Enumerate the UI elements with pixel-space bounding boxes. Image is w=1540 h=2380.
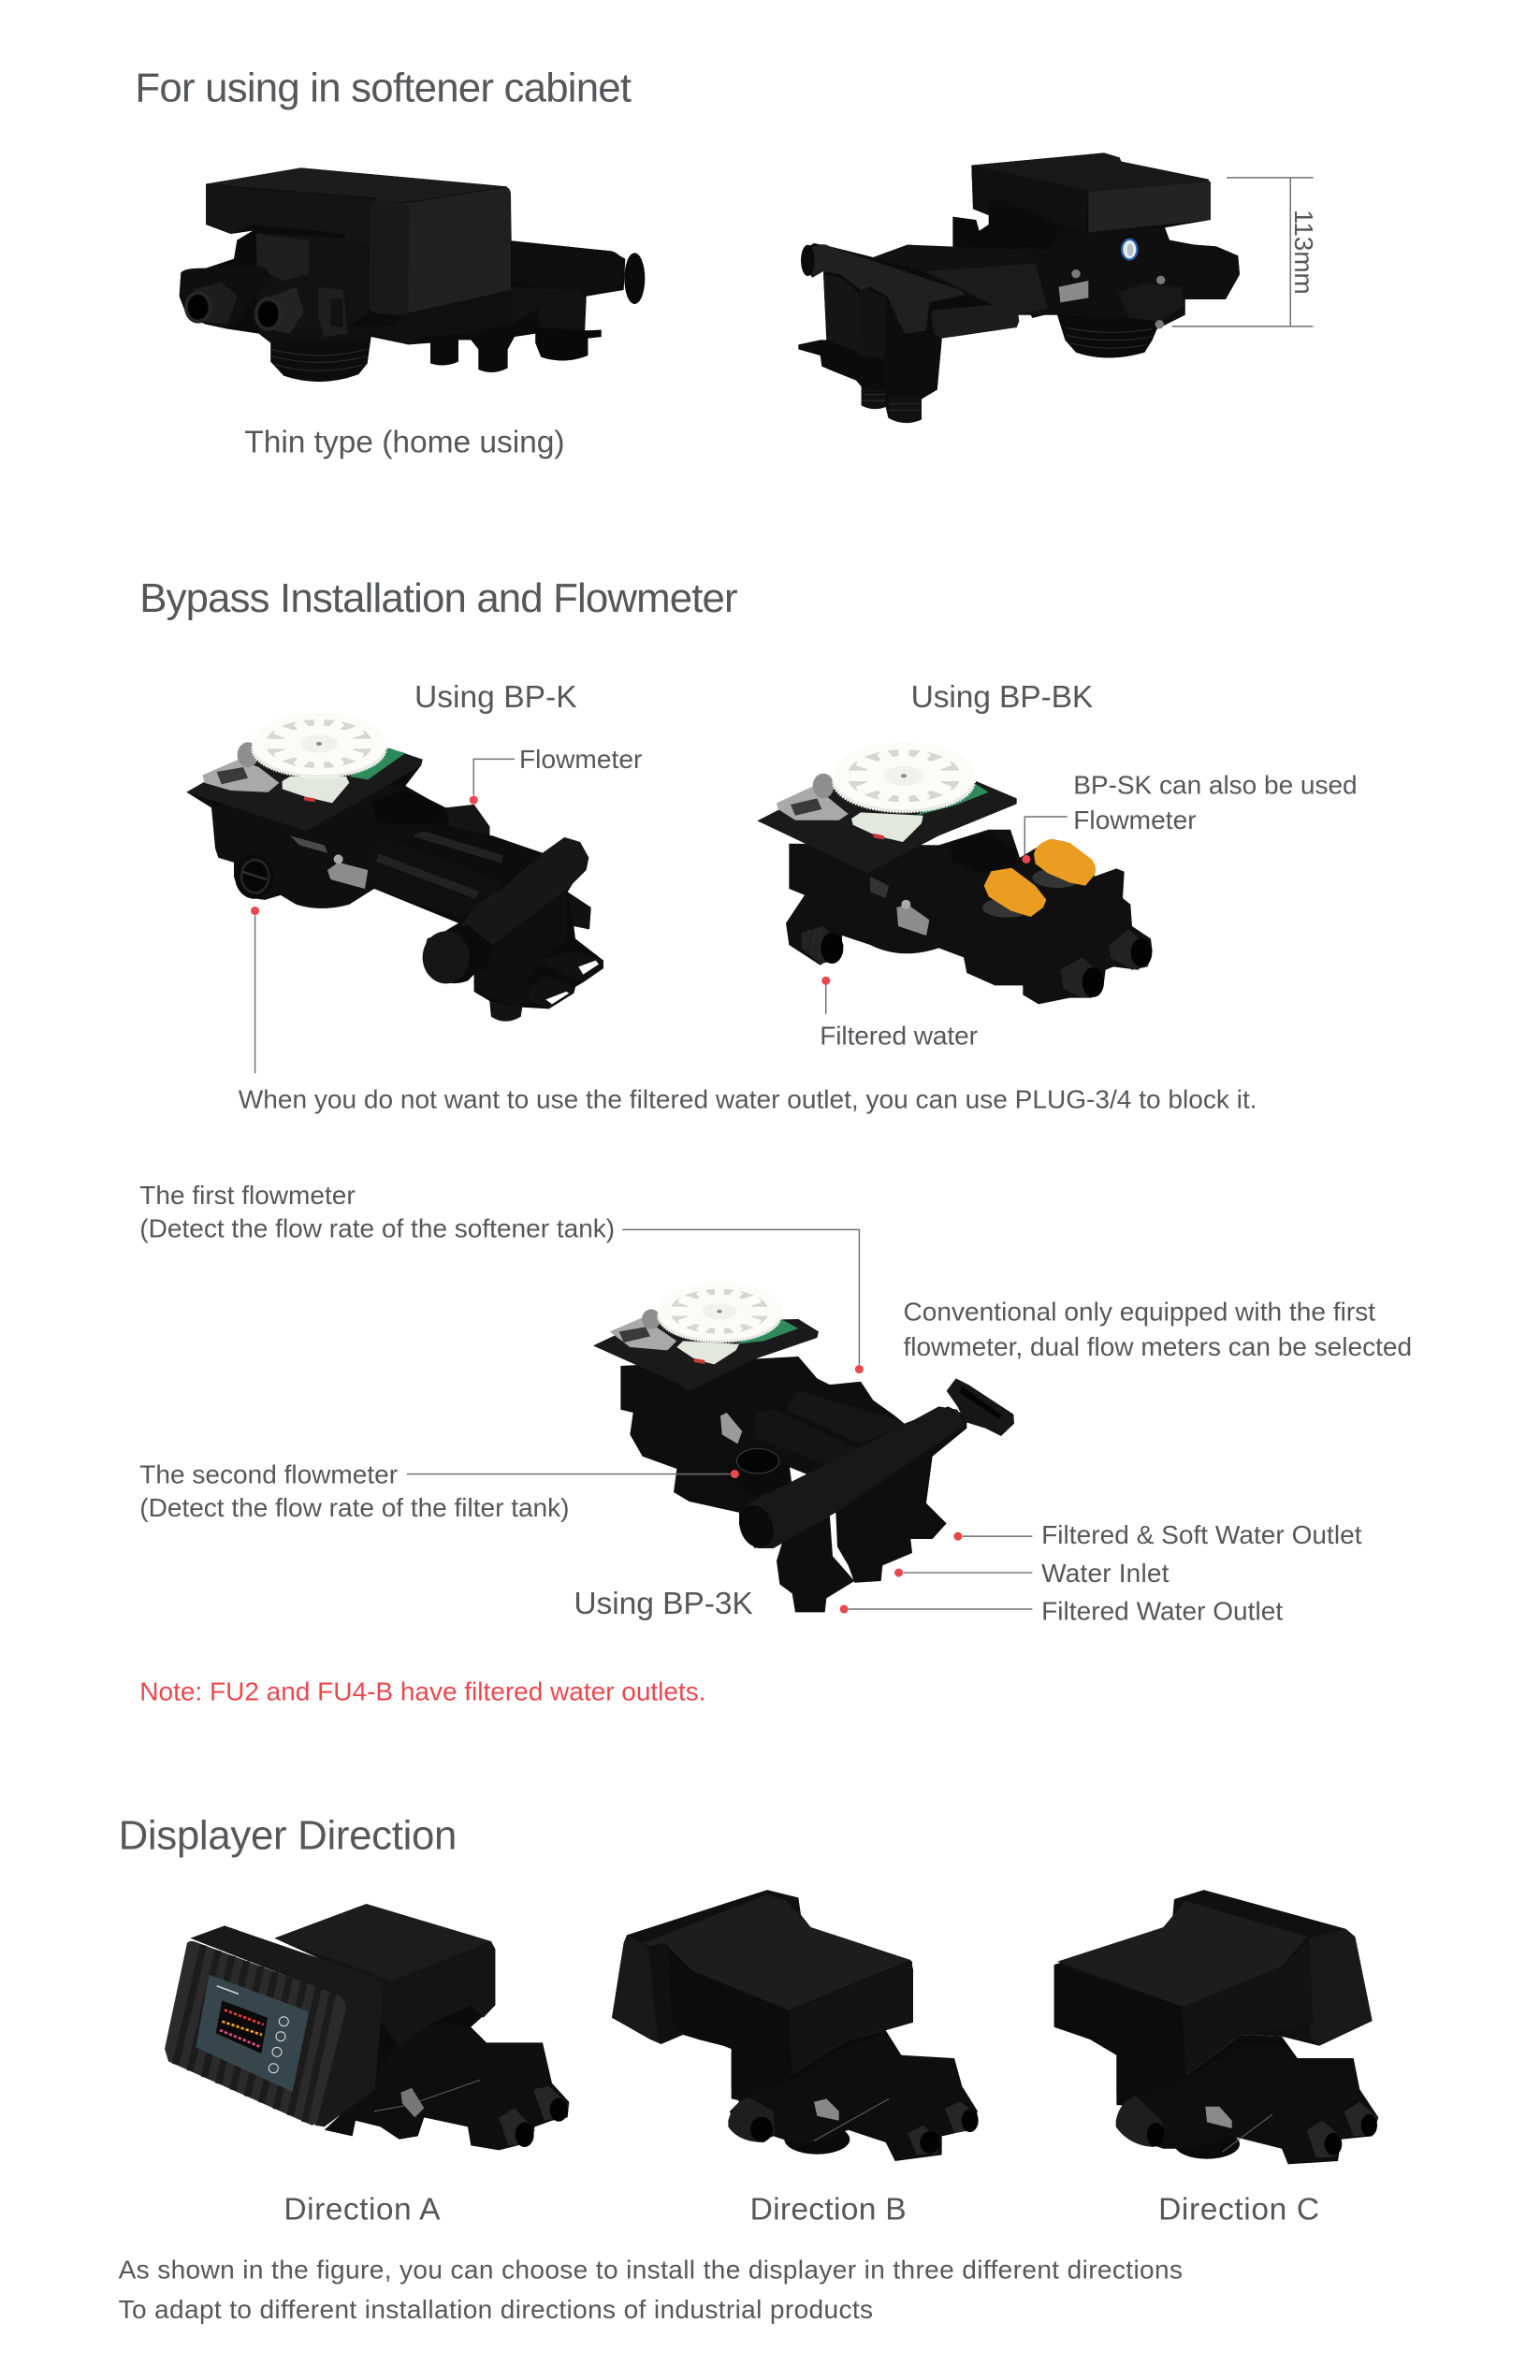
callout: second flowmeter: The second flowmeter xyxy=(139,1459,398,1488)
underlay xyxy=(732,2030,901,2112)
connector xyxy=(676,1341,739,1364)
callout: filtered water: Filtered water xyxy=(820,1021,978,1050)
manifold lower xyxy=(487,889,568,989)
gloss highlight xyxy=(290,835,327,853)
label: thin type: Thin type (home using) xyxy=(244,426,565,460)
silhouette xyxy=(186,742,603,1022)
product: thin type valve, rear xyxy=(798,152,1240,423)
T handle xyxy=(947,1378,1014,1436)
label: direction B: Direction B xyxy=(750,2192,907,2227)
threaded base xyxy=(1065,318,1154,358)
callout: second flowmeter: (Detect the flow rate of the filter tank) xyxy=(139,1493,569,1522)
silver bracket xyxy=(777,774,849,820)
callout: water inlet: Water Inlet xyxy=(1041,1559,1170,1588)
rear cover xyxy=(274,1904,495,2046)
dimension: 113mm: 113mm xyxy=(1289,210,1318,295)
top plate xyxy=(186,742,423,831)
product: direction C xyxy=(1054,1890,1378,2164)
callout: BP-BK flowmeter: BP-SK can also be used xyxy=(1073,771,1358,800)
silver bracket xyxy=(610,1309,676,1350)
PCB xyxy=(349,747,405,779)
port xyxy=(235,854,273,899)
end cap xyxy=(624,253,645,304)
top surface xyxy=(1057,1901,1307,2007)
silver bracket xyxy=(203,742,279,792)
title: For using in softener cabinet: For using in softener cabinet xyxy=(135,65,632,111)
rear pipe xyxy=(396,823,543,881)
threaded base xyxy=(270,341,368,382)
panel shell xyxy=(190,1925,384,2126)
text: displayer explanation xyxy=(119,2256,1183,2324)
product: valve with BP-3K bypass xyxy=(593,1283,1014,1612)
callout: filtered water outlet xyxy=(840,1596,1283,1625)
left wing xyxy=(612,1935,658,2042)
note: FU2 and FU4-B: Note: FU2 and FU4-B have filtered water outlets. xyxy=(139,1676,706,1705)
front face xyxy=(667,1946,792,2074)
left port xyxy=(180,265,274,329)
label: direction A: Direction A xyxy=(283,2192,441,2227)
product: direction A xyxy=(165,1904,569,2150)
bottom thread xyxy=(489,1001,522,1022)
pipes xyxy=(755,1391,908,1466)
handle discs xyxy=(982,868,1082,918)
valve fittings xyxy=(325,2024,569,2150)
hose fitting xyxy=(952,833,1017,873)
gear xyxy=(658,1283,781,1342)
foot xyxy=(535,327,602,360)
silhouette xyxy=(786,830,1153,1004)
body xyxy=(259,287,512,344)
side bracket xyxy=(568,892,591,929)
label: using BP-3K: Using BP-3K xyxy=(574,1587,753,1621)
PCB xyxy=(736,1319,798,1344)
callout: filtered water outlet: Filtered Water Outlet xyxy=(1041,1596,1283,1625)
text: displayer explanation: As shown in the figure, you can choose to install the displayer in three different directions xyxy=(119,2256,1183,2285)
front face xyxy=(1054,1965,1185,2074)
underlay xyxy=(1116,2035,1298,2112)
housing base xyxy=(612,1890,913,2074)
gear xyxy=(833,742,975,812)
callout: filtered water xyxy=(820,977,978,1050)
manifold xyxy=(801,244,966,334)
plug xyxy=(423,924,493,983)
valve body xyxy=(1017,227,1240,329)
connector xyxy=(283,776,349,803)
text: displayer explanation: To adapt to different installation directions of industrial products xyxy=(119,2295,873,2324)
callout: BP-BK flowmeter xyxy=(1022,771,1358,863)
callout: first flowmeter: (Detect the flow rate of the softener tank) xyxy=(139,1213,615,1242)
underlay xyxy=(337,1949,495,2130)
bracket loop xyxy=(318,287,348,337)
blue port xyxy=(1121,239,1139,261)
right face xyxy=(1184,1939,1313,2074)
silver clip xyxy=(327,863,368,889)
dimension: 113mm xyxy=(1172,178,1318,327)
callout: filtered and soft water outlet: Filtered & Soft Water Outlet xyxy=(1041,1520,1362,1549)
silhouette xyxy=(620,1357,966,1612)
elbow xyxy=(512,287,587,334)
buttons xyxy=(269,2017,288,2073)
controller box xyxy=(206,167,511,315)
rear flowmeter xyxy=(446,805,489,835)
screws xyxy=(1071,269,1165,328)
PCB xyxy=(917,784,989,816)
callout: flowmeter BP-K: Flowmeter xyxy=(519,745,642,774)
stem xyxy=(732,2052,792,2102)
silver clip xyxy=(896,905,929,936)
gap between pipes xyxy=(790,1467,821,1486)
panel face xyxy=(165,1941,346,2126)
stems xyxy=(823,274,942,393)
foot loops xyxy=(474,951,603,1009)
threads xyxy=(862,386,922,423)
valve fittings xyxy=(1116,2046,1378,2164)
stem xyxy=(1116,2055,1185,2102)
second flowmeter xyxy=(727,1448,789,1497)
callout: BP-BK flowmeter: Flowmeter xyxy=(1073,805,1197,834)
gloss highlight xyxy=(870,877,889,898)
silver clip xyxy=(1059,281,1088,302)
side clip xyxy=(1118,283,1184,321)
silhouette xyxy=(180,167,625,382)
front port xyxy=(1060,957,1104,998)
screen xyxy=(196,1975,309,2092)
right face xyxy=(789,1961,913,2074)
text: conventional flowmeter: Conventional only equipped with the first xyxy=(903,1298,1375,1327)
right pipe xyxy=(512,240,624,297)
valve fittings xyxy=(728,2033,979,2161)
callout: first flowmeter xyxy=(139,1181,864,1373)
pipe highlights xyxy=(377,833,502,895)
housing base xyxy=(1054,1890,1373,2074)
product: direction B xyxy=(612,1890,979,2161)
main body xyxy=(211,786,446,908)
heading: displayer direction: Displayer Direction xyxy=(119,1812,457,1858)
rear pipes xyxy=(873,245,1048,315)
top plate xyxy=(593,1319,819,1391)
callout: second flowmeter xyxy=(139,1459,739,1522)
bypass lever xyxy=(931,302,1019,339)
label: using BP-BK: Using BP-BK xyxy=(911,680,1094,715)
end cap xyxy=(734,1501,779,1553)
manifold xyxy=(458,837,588,945)
text: conventional flowmeter xyxy=(903,1298,1412,1361)
hose fitting xyxy=(371,791,446,825)
label: direction C: Direction C xyxy=(1158,2192,1319,2227)
product: thin type valve, front xyxy=(180,167,645,382)
elbow port xyxy=(802,926,844,964)
note: plug: When you do not want to use the filtered water outlet, you can use PLUG-3/4 to block it. xyxy=(239,1085,1257,1114)
callout: flowmeter BP-K xyxy=(470,745,642,805)
top plate xyxy=(757,781,1017,873)
heading: bypass installation: Bypass Installation and Flowmeter xyxy=(139,575,738,621)
controller box xyxy=(971,152,1211,232)
rear port xyxy=(1109,929,1153,970)
callout: first flowmeter: The first flowmeter xyxy=(139,1181,356,1210)
centre port xyxy=(254,287,304,334)
text: conventional flowmeter: flowmeter, dual flow meters can be selected xyxy=(903,1332,1412,1361)
product: valve with BP-BK bypass xyxy=(757,742,1153,1004)
label: using BP-K: Using BP-K xyxy=(414,680,577,715)
hose fitting xyxy=(980,215,1057,250)
orange handles xyxy=(984,839,1096,917)
gear xyxy=(252,713,386,777)
panel stripes xyxy=(176,1945,333,2122)
front pipe xyxy=(365,842,505,917)
callout: plug outlet xyxy=(251,907,259,1073)
top surface xyxy=(643,1894,910,2010)
LED readout xyxy=(216,2000,268,2053)
column xyxy=(255,232,368,330)
callout: water inlet xyxy=(894,1559,1170,1588)
right wing xyxy=(1310,1929,1373,2046)
connector xyxy=(851,812,923,842)
silhouette xyxy=(798,152,1240,423)
logo mark xyxy=(217,1986,239,1994)
silver clip xyxy=(720,1413,742,1444)
product: valve with BP-K bypass xyxy=(186,713,603,1022)
manifold xyxy=(739,1406,966,1548)
